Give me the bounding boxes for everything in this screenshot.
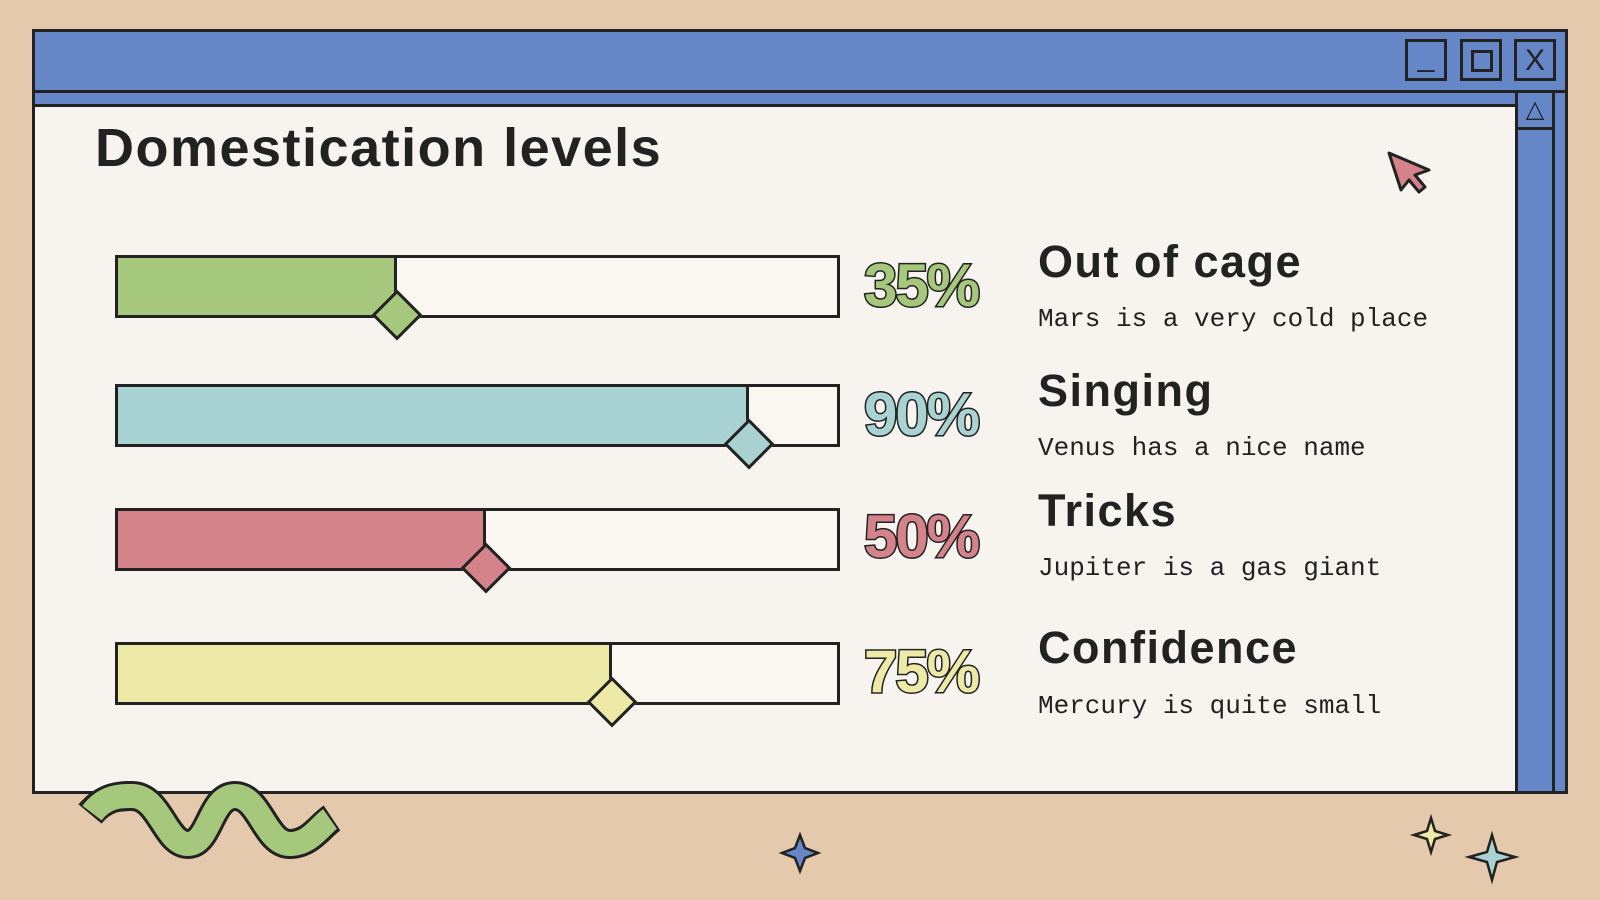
text: Mars is a very cold place — [1038, 304, 1428, 334]
bar 4 — [115, 642, 840, 705]
bar 3 — [115, 508, 840, 571]
text: Confidence — [1038, 622, 1298, 673]
squiggle — [78, 781, 340, 859]
scrollbar — [1515, 93, 1565, 791]
text: 50% — [864, 503, 978, 570]
text: Venus has a nice name — [1038, 433, 1366, 463]
text: 75% — [864, 638, 978, 705]
window buttons — [1405, 39, 1447, 81]
window: △ — [1526, 96, 1544, 123]
text: Mercury is quite small — [1038, 691, 1381, 721]
bar 1 — [115, 255, 840, 318]
bar 2 — [115, 384, 840, 447]
labels: Out of cage — [1038, 236, 1302, 287]
cursor icon — [1388, 152, 1431, 194]
text: Jupiter is a gas giant — [1038, 553, 1381, 583]
text: Singing — [1038, 365, 1213, 416]
title bar — [35, 32, 1565, 93]
text: X — [1525, 44, 1545, 77]
window buttons: _ — [1418, 40, 1434, 73]
title: Domestication levels — [95, 118, 662, 178]
text: 90% — [864, 381, 978, 448]
text: Tricks — [1038, 485, 1177, 536]
percentages: 35% — [864, 252, 978, 319]
